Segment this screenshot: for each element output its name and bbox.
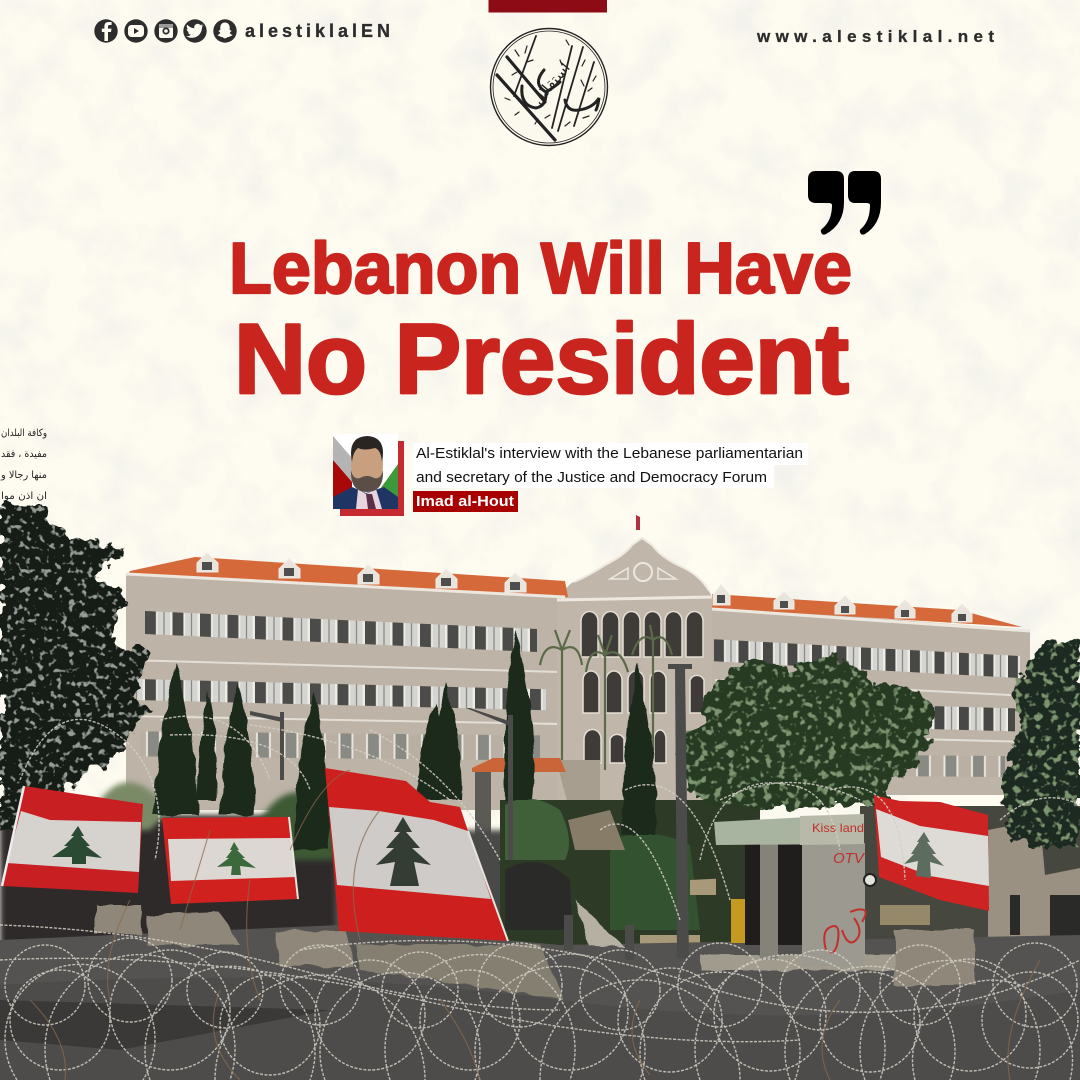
lower palace wall [556, 760, 600, 830]
faded Arabic newspaper text: مفيدة ، فقد [1, 449, 47, 460]
faded Arabic newspaper text [0, 428, 47, 502]
intro text [413, 443, 808, 488]
faded Arabic newspaper text: وكافة البلدان [1, 428, 47, 439]
central pavilion [557, 538, 712, 800]
intro text: Al-Estiklal's interview with the Lebanese parliamentarian [416, 445, 803, 462]
faded Arabic newspaper text: ان اذن موا [1, 491, 47, 502]
right roof [712, 594, 1022, 627]
name label: Imad al-Hout [416, 493, 514, 510]
guard kiosk: OTV [833, 850, 866, 867]
cypress trees [153, 630, 656, 850]
top red bar [488, 0, 607, 12]
right central tree [680, 657, 931, 810]
right wing facade [705, 605, 1030, 795]
portrait of Imad al-Hout [333, 434, 404, 516]
logo: calligraphy roundel [490, 28, 608, 146]
flag 4 [874, 795, 989, 911]
title: Lebanon Will Have [229, 229, 852, 309]
string courses [126, 660, 1030, 742]
dormers [197, 553, 972, 622]
dark fence band and gardens [0, 782, 1080, 955]
palm trees [540, 625, 672, 770]
guard kiosk: Kiss land [812, 821, 864, 835]
far right tree [1002, 638, 1080, 850]
small rooftop flag [636, 515, 640, 530]
title [229, 229, 852, 414]
road [0, 925, 1080, 1080]
social media icons [94, 19, 237, 43]
central arches [581, 611, 704, 763]
big left tree [0, 505, 150, 830]
flag 1 [2, 786, 143, 893]
intro text: and secretary of the Justice and Democracy Forum [416, 469, 767, 486]
photo: government palace [126, 515, 1030, 842]
razor wire [0, 716, 1080, 1080]
guard kiosk [714, 814, 876, 966]
logo: calligraphy roundel: استقلال [529, 59, 574, 108]
website url: www.alestiklal.net [756, 27, 994, 46]
left roof [128, 557, 568, 597]
social handle: alestiklalEN [245, 21, 393, 41]
title: No President [234, 303, 849, 414]
closing quote mark [808, 171, 881, 235]
trees [0, 505, 1080, 850]
window rows [136, 611, 1020, 777]
left wing facade [126, 574, 565, 810]
Lebanese flags [2, 768, 989, 941]
rust-coloured wire strands [30, 770, 1040, 1080]
faded Arabic newspaper text: منها رجالا و [0, 470, 47, 481]
flag 3 [325, 768, 508, 941]
concrete barriers [95, 900, 975, 1000]
street lamps [250, 664, 692, 960]
flag 2 [162, 817, 298, 904]
coiled wire heap [505, 862, 572, 930]
